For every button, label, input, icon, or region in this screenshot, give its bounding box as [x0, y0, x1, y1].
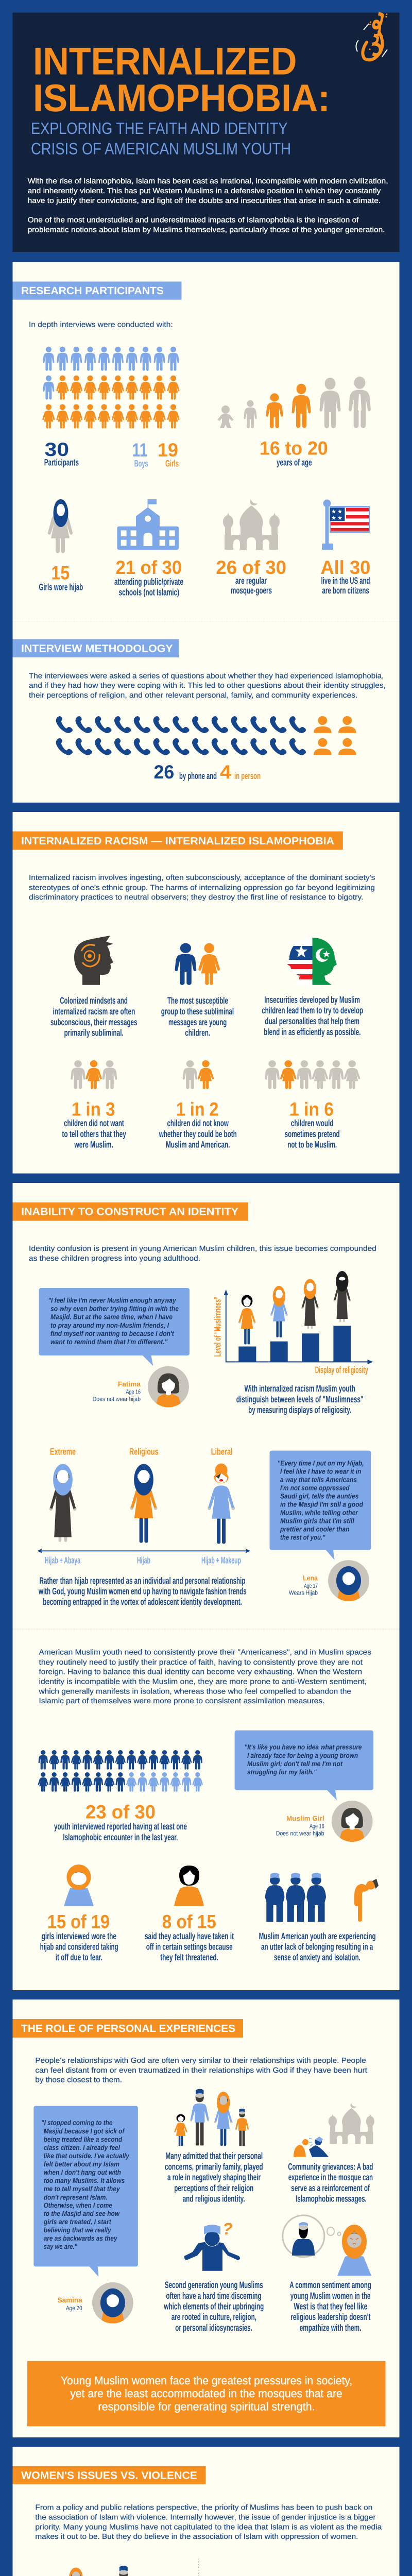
text: personal concerns: [165, 2150, 263, 2204]
text: internalized racism: stereotypes of one's ethnic group. The harms of internalizing oppression go far beyond legitimizing: [29, 884, 375, 892]
caption: Samina: Samina: [58, 2296, 82, 2304]
panel: inability to construct an identity: [12, 1183, 400, 1990]
callout: Lena quote: Saudi girl, tells the aunties: [280, 1493, 359, 1500]
callout: Samina quote: when I don't hang out with: [44, 2168, 121, 2176]
logo: Arabic calligraphy: يقين: [357, 8, 390, 59]
stat: 15 of 19: girls interviewed wore the: [42, 1931, 116, 1941]
text: lack of belonging: [259, 1931, 376, 1962]
text: dual identity: [38, 1649, 371, 1705]
icon: mosque with bad experience: [294, 2103, 374, 2157]
caption: Lena: [289, 1574, 318, 1597]
caption: Samina: Age 20: [66, 2304, 82, 2312]
callout: Lena quote: I'm not some oppressed: [280, 1484, 350, 1492]
stat: 8 of 15: they felt threatened.: [160, 1952, 218, 1962]
stat: 15 girls wore hijab: Girls wore hijab: [39, 582, 83, 592]
stat: 26 by phone and 4 in person: by phone and: [179, 771, 217, 781]
stat: 1 in 2: Muslim and American.: [166, 1140, 230, 1150]
callout: Samina quote: Masjid because I got sick of: [44, 2127, 125, 2135]
stat: 19 girls: 19: [158, 439, 178, 461]
heading: interview methodology: INTERVIEW METHODOLOGY: [21, 642, 173, 654]
stat: all 30: [320, 557, 370, 596]
callout: Muslim Girl quote: I already face for being a young brown: [247, 1752, 358, 1759]
text: policy perspective: [35, 2504, 382, 2541]
callout: Samina quote: believing that we really: [44, 2226, 112, 2234]
stat: 23 of 30: youth interviewed reported having at least one: [54, 1821, 187, 1832]
text: lack of belonging: sense of anxiety and isolation.: [274, 1952, 360, 1962]
panel: research participants and methodology: [12, 262, 400, 803]
callout: Fatima quote: to pray around my non-Muslim friends, I: [50, 1321, 169, 1329]
text: dual identity: Islamic part of themselves were more prone to consistent assimilation measures.: [39, 1697, 324, 1705]
stat: 8 of 15: [145, 1911, 234, 1962]
heading: women's issues: WOMEN'S ISSUES VS. VIOLENCE: [21, 2470, 197, 2481]
figure: extreme: [49, 1447, 76, 1542]
text: identity confusion: Identity confusion is present in young American Muslim children, this issue becomes compounded: [29, 1245, 376, 1253]
icon: family: [174, 2089, 249, 2146]
stat: 21 of 30: 21 of 30: [115, 557, 182, 578]
text: most susceptible group: The most susceptible: [167, 995, 228, 1006]
callout: young Muslim women: responsible for generating spiritual strength.: [98, 2400, 315, 2413]
stat: 30 participants: Participants: [44, 457, 79, 468]
stat: 26 by phone and 4 in person: [153, 761, 261, 783]
callout: Lena quote: Muslim, while telling other: [280, 1509, 358, 1516]
callout: Samina quote: to the Masjid and see how: [44, 2210, 120, 2217]
callout: Samina quote: are as backwards as they: [44, 2234, 118, 2242]
callout: Muslim Girl quote: [235, 1731, 373, 1800]
text: levels of Muslimness: With internalized racism Muslim youth: [244, 1383, 355, 1394]
stat: 8 of 15: 8 of 15: [162, 1911, 216, 1932]
icon: school: [117, 499, 179, 550]
text: levels of Muslimness: [236, 1383, 364, 1415]
stat: 30 participants: 30: [45, 439, 69, 460]
stat: all 30: All 30: [320, 557, 370, 578]
figure: extreme: Extreme: [50, 1447, 76, 1457]
title: ISLAMOPHOBIA:: [33, 76, 330, 120]
heading: personal experiences: [12, 2019, 243, 2038]
stat: 1 in 3: were Muslim.: [74, 1140, 113, 1150]
text: hijab and fashion: Rather than hijab represented as an individual and personal relationship: [39, 1575, 246, 1586]
avatar: Muslim Girl: [332, 1801, 373, 1842]
chart: 26 phones and 4 in-person icons: [56, 716, 356, 755]
text: personal concerns: perceptions of their religion: [174, 2183, 253, 2193]
figure: liberal: [208, 1447, 235, 1544]
text: colonized mindsets: internalized racism are often: [53, 1006, 135, 1016]
callout: Lena quote: the rest of you.": [280, 1534, 325, 1541]
icon: American flag: ★: [331, 515, 336, 521]
stat: 26 of 30: [216, 557, 286, 596]
stat: 26 of 30: are regular: [235, 575, 267, 586]
caption: Fatima: [93, 1380, 141, 1403]
avatar: Samina: [92, 2282, 133, 2324]
stat: 8 of 15: said they actually have taken it: [145, 1931, 234, 1941]
callout: Samina quote: being treated like a second: [44, 2136, 123, 2143]
callout: Lena quote: in the Masjid I'm still a good: [280, 1501, 364, 1509]
text: common sentiment: young Muslim women in the: [290, 2291, 370, 2301]
text: identity confusion: as these children progress into young adulthood.: [29, 1255, 200, 1263]
labels: hijab spectrum: Hijab + Abaya: [45, 1555, 81, 1565]
stat: 1 in 2: [159, 1098, 237, 1150]
chart: level of Muslimness by display of religiosity: Level of "Muslimness": [213, 1297, 223, 1357]
icon: American flag: ★: [337, 515, 342, 521]
text: second generation: or personal idiosyncrasies.: [175, 2323, 252, 2333]
icon: mosque: [223, 499, 280, 550]
callout: Muslim Girl quote: struggling for my faith.": [247, 1768, 317, 1776]
icon: 1 in 3: [71, 1060, 117, 1089]
stat: 15 of 19: 15 of 19: [47, 1911, 110, 1932]
stat: 23 of 30: [54, 1802, 187, 1842]
text: dual identity: identity is incompatible with the Muslim one, they are more prone to anti-Western sentiment,: [39, 1678, 367, 1686]
text: second generation: [164, 2280, 264, 2333]
callout: Fatima quote: so why even bother trying fitting in with the: [50, 1305, 179, 1313]
intro text: problematic notions about Islam by Muslims themselves, particularly those of the younger generation.: [28, 226, 385, 234]
chart: level of Muslimness by display of religiosity: Display of religiosity: [315, 1365, 368, 1375]
text: community grievances: [288, 2162, 373, 2204]
heading: internalized racism: INTERNALIZED RACISM — INTERNALIZED ISLAMOPHOBIA: [21, 835, 334, 847]
subtitle: [31, 119, 291, 158]
stat: 26 of 30: 26 of 30: [216, 557, 286, 578]
labels: hijab spectrum: [45, 1555, 241, 1565]
text: colonized mindsets: [50, 995, 137, 1038]
text: hijab and fashion: [38, 1575, 247, 1607]
heading: interview methodology: [12, 639, 179, 657]
icon: American flag: [322, 500, 370, 550]
stat: 11 boys: [132, 439, 148, 468]
callout: Samina quote: [33, 2106, 138, 2277]
caption: Fatima: Fatima: [118, 1380, 141, 1388]
panel: internalized racism: [12, 812, 400, 1174]
icon: American flag: ★: [331, 509, 336, 515]
callout: Lena quote: I feel like I have to wear it in: [280, 1467, 362, 1475]
heading: personal experiences: THE ROLE OF PERSONAL EXPERIENCES: [21, 2023, 235, 2035]
stat: 21 of 30: attending public/private: [114, 577, 183, 587]
arrow: spectrum: [37, 1549, 250, 1553]
text: community grievances: Islamophobic messages.: [296, 2194, 367, 2204]
stat: 30 participants: [44, 439, 79, 468]
text: most susceptible group: messages are young: [168, 1017, 227, 1027]
text: personal concerns: a role in negatively shaping their: [167, 2172, 261, 2182]
callout: Samina quote: don't represent Islam.: [44, 2193, 108, 2201]
heading: research participants: RESEARCH PARTICIPANTS: [21, 285, 164, 297]
text: methodology: [29, 672, 386, 700]
text: policy perspective: priority. Many young Muslims have not capitulated to the idea that Islam is as violent as the media: [35, 2523, 382, 2532]
stat: 1 in 2: 1 in 2: [176, 1098, 218, 1120]
heading: inability: INABILITY TO CONSTRUCT AN IDENTITY: [21, 1206, 238, 1218]
text: policy perspective: From a policy and public relations perspective, the priority of Muslims has been to push back on: [35, 2504, 372, 2512]
text: identity confusion: [29, 1245, 376, 1263]
icon: American flag: ★: [337, 509, 342, 515]
caption: Muslim Girl: [276, 1815, 324, 1837]
panel: hero: [12, 8, 400, 252]
callout: Fatima quote: want to remind them that I'm different.": [50, 1338, 168, 1346]
callout: Fatima quote: "I feel like I'm never Muslim enough anyway: [48, 1297, 177, 1304]
text: colonized mindsets: Colonized mindsets and: [60, 995, 128, 1006]
text: community grievances: serve as a reinforcement of: [291, 2183, 370, 2193]
text: relationships with God: by those closest to them.: [35, 2076, 122, 2084]
icon: 1 in 6: [265, 1060, 360, 1089]
stat: 1 in 6: [285, 1098, 340, 1150]
text: colonized mindsets: subconscious, their messages: [50, 1017, 137, 1027]
text: insecurities: [262, 995, 363, 1037]
callout: Lena quote: a way that tells Americans: [280, 1476, 357, 1484]
text: relationships with God: [35, 2057, 367, 2084]
text: second generation: are rooted in culture, religion,: [171, 2312, 256, 2322]
stat: 16 to 20 years: 16 to 20: [260, 437, 328, 459]
intro text: With the rise of Islamophobia, Islam has been cast as irrational, incompatible with modern civilization,: [28, 177, 388, 185]
text: policy perspective: makes it out to be. But they do believe in the association of Islam with oppression of women.: [35, 2533, 358, 2541]
text: interviews intro: In depth interviews were conducted with:: [29, 320, 173, 329]
callout: Samina quote: Otherwise, when I come: [44, 2201, 112, 2209]
icon: group of men and isolated praying figure: [265, 1873, 379, 1922]
caption: Lena: Wears Hijab: [289, 1589, 318, 1597]
icon: two children: [175, 943, 220, 985]
stat: 1 in 6: sometimes pretend: [285, 1129, 340, 1139]
text: hijab and fashion: with God, young Muslim women end up having to navigate fashion trends: [38, 1586, 247, 1596]
stat: 26 by phone and 4 in person: in person: [234, 771, 261, 781]
intro text: One of the most understudied and underestimated impacts of Islamophobia is the ingestion of: [28, 216, 359, 224]
text: dual identity: which generally manifests in isolation, whereas those who feel compelled to abandon the: [38, 1687, 351, 1696]
text: insecurities: blend in as efficiently as possible.: [264, 1027, 360, 1037]
labels: hijab spectrum: Hijab + Makeup: [201, 1555, 241, 1565]
text: internalized racism: Internalized racism involves ingesting, often subconsciously, acceptance of the dominant society's: [29, 874, 375, 882]
text: most susceptible group: group to these subliminal: [161, 1006, 234, 1016]
text: levels of Muslimness: by measuring displays of religiosity.: [248, 1404, 351, 1415]
text: relationships with God: can feel distant from or even traumatized in their relationships with God if they have been hurt: [35, 2066, 367, 2075]
panel: role of personal experiences: [12, 1999, 400, 2437]
callout: Muslim Girl quote: "It's like you have no idea what pressure: [244, 1743, 362, 1751]
intro text: [28, 177, 388, 234]
icon: girl wearing hijab: [48, 499, 73, 553]
chart: level of Muslimness by display of religiosity: [213, 1271, 373, 1375]
caption: Muslim Girl: Does not wear hijab: [276, 1830, 324, 1837]
callout: Fatima quote: find myself not wanting to because I don't: [50, 1330, 174, 1337]
figure: liberal: Liberal: [211, 1447, 233, 1457]
text: policy perspective: the association of Islam with violence. Internally however, the issue of gender injustice is a bigger: [35, 2513, 376, 2521]
icon: worried woman imagining imam: [283, 2215, 371, 2276]
callout: young Muslim women: Young Muslim women face the greatest pressures in society,: [61, 2374, 352, 2387]
stat: 1 in 2: whether they could be both: [159, 1129, 237, 1139]
stat: all 30: live in the US and: [321, 575, 370, 586]
callout: Samina quote: felt better about my Islam: [44, 2160, 119, 2168]
text: common sentiment: empathize with them.: [300, 2323, 362, 2333]
callout: young Muslim women: [27, 2361, 385, 2426]
callout: Lena quote: [270, 1451, 371, 1560]
subtitle: EXPLORING THE FAITH AND IDENTITY: [31, 119, 287, 138]
stat: 1 in 6: not to be Muslim.: [287, 1140, 337, 1150]
icon: head with flags: [286, 937, 338, 986]
icon: woman with hair: [174, 1866, 204, 1906]
text: dual identity: American Muslim youth need to consistently prove their "Americaness", and in Muslim spaces: [39, 1649, 371, 1657]
labels: hijab spectrum: Hijab: [137, 1555, 150, 1565]
caption: Fatima: Age 16: [126, 1388, 141, 1395]
callout: Muslim Girl quote: Muslim girl; don't tell me I'm not: [247, 1760, 342, 1768]
text: dual identity: foreign. Having to balance this dual identity can become very exhausting. When the Western: [39, 1668, 362, 1676]
stat: 15 of 19: [40, 1911, 118, 1962]
figure: religious: [129, 1447, 159, 1543]
avatar: Lena: [328, 1560, 369, 1601]
icon: gender inequality: [66, 2566, 133, 2576]
stat: 21 of 30: schools (not Islamic): [119, 587, 179, 598]
stat: 16 to 20 years: years of age: [277, 457, 312, 468]
stat: 1 in 3: [62, 1098, 126, 1150]
callout: Samina quote: say we are.": [44, 2243, 77, 2250]
stat: 15 girls wore hijab: [39, 562, 83, 592]
text: most susceptible group: children.: [185, 1027, 210, 1038]
title: [33, 40, 330, 120]
icon: confused man: ?: [222, 2219, 233, 2238]
text: hijab and fashion: becoming entrapped in the vortex of adolescent identity development.: [43, 1597, 242, 1607]
caption: Fatima: Does not wear hijab: [93, 1396, 141, 1403]
stat: 8 of 15: off in certain settings because: [146, 1941, 233, 1952]
callout: Fatima quote: [39, 1288, 190, 1366]
stat: 11 boys: 11: [132, 439, 148, 461]
text: methodology: their perceptions of religion, and other relevant personal, family, and community experiences.: [29, 691, 357, 700]
callout: Samina quote: class citizen. I already feel: [44, 2144, 120, 2151]
stat: 1 in 6: 1 in 6: [289, 1098, 334, 1120]
text: internalized racism: discriminatory practices to neutral observers; they destroy the first line of resistance to bigotry.: [29, 893, 364, 902]
caption: Muslim Girl: Muslim Girl: [286, 1815, 324, 1822]
text: second generation: often have a hard time discerning: [166, 2291, 262, 2301]
text: personal concerns: and religious identity.: [183, 2194, 245, 2204]
text: internalized racism: [29, 874, 375, 902]
stat: 21 of 30: [114, 557, 183, 598]
caption: Samina: [58, 2296, 82, 2312]
callout: Lena quote: "Every time I put on my Hijab,: [278, 1460, 364, 1467]
panel: women's issues vs violence: [12, 2447, 400, 2576]
chart: 23 of 30 youth: [38, 1750, 203, 1792]
text: dual identity: they routinely need to justify their practice of faith, having to consistently prove they are not: [39, 1658, 363, 1667]
callout: Lena quote: prettier and cooler than: [280, 1525, 350, 1533]
stat: 26 of 30: mosque-goers: [231, 585, 272, 596]
stat: 23 of 30: 23 of 30: [85, 1802, 156, 1823]
stat: 15 of 19: it off due to fear.: [56, 1952, 102, 1962]
icon: age progression: [217, 377, 371, 428]
text: most susceptible group: [161, 995, 234, 1038]
callout: Samina quote: "I stopped coming to the: [41, 2119, 113, 2127]
icon: 1 in 2: [183, 1060, 214, 1089]
heading: internalized racism: [12, 832, 343, 850]
stat: 26 by phone and 4 in person: 4: [220, 761, 231, 783]
figure: religious: Religious: [129, 1447, 159, 1457]
stat: 16 to 20 years: [260, 437, 328, 468]
stat: 1 in 2: children did not know: [167, 1118, 229, 1128]
callout: young Muslim women: yet are the least accommodated in the mosques that are: [70, 2387, 342, 2400]
stat: 1 in 3: to tell others that they: [62, 1129, 126, 1139]
callout: Samina quote: me to tell myself that they: [44, 2185, 121, 2193]
icon: head with spiral: [74, 936, 113, 985]
subtitle: CRISIS OF AMERICAN MUSLIM YOUTH: [31, 140, 291, 158]
stat: 15 girls wore hijab: 15: [52, 562, 70, 583]
text: methodology: The interviewees were asked a series of questions about whether they had experienced Islamophobia,: [29, 672, 384, 680]
callout: Samina quote: like that outside. I've actually: [44, 2152, 130, 2160]
callout: Lena quote: Muslim girls that I'm still: [280, 1517, 354, 1524]
text: relationships with God: People's relationships with God are often very similar to their relationships with people. People: [35, 2057, 366, 2065]
text: insecurities: dual personalities that help them: [265, 1016, 359, 1026]
chart: 11 boys and 19 girls: [42, 347, 180, 429]
text: personal concerns: Many admitted that their personal: [165, 2150, 263, 2161]
heading: women's issues: [12, 2466, 206, 2484]
text: second generation: which elements of their upbringing: [164, 2301, 264, 2311]
caption: Muslim Girl: Age 16: [310, 1822, 324, 1829]
stat: 19 girls: Girls: [165, 458, 179, 468]
stat: 1 in 6: children would: [291, 1118, 334, 1128]
text: second generation: Second generation young Muslims: [165, 2280, 263, 2290]
stat: 1 in 3: children did not want: [64, 1118, 124, 1128]
stat: 23 of 30: Islamophobic encounter in the last year.: [63, 1832, 178, 1842]
text: colonized mindsets: primarily subliminal.: [64, 1027, 124, 1038]
text: personal concerns: concerns, primarily family, played: [165, 2162, 263, 2172]
avatar: Fatima: [148, 1366, 189, 1408]
stat: 11 boys: Boys: [134, 458, 148, 468]
caption: Lena: Age 17: [304, 1582, 318, 1589]
text: common sentiment: [289, 2280, 371, 2333]
icon: woman with orange hijab: [64, 1865, 94, 1906]
heading: inability: [12, 1202, 248, 1221]
title: INTERNALIZED: [33, 40, 297, 83]
stat: all 30: are born citizens: [322, 585, 369, 596]
callout: Samina quote: girls are treated, I start: [43, 2218, 111, 2226]
text: methodology: and if they had how they were coping with it. This led to other questions about their identity struggles,: [29, 682, 386, 690]
icon: confused man: [184, 2219, 240, 2271]
intro text: and inherently violent. This has put Western Muslims in a defensive position in which they constantly: [28, 187, 381, 195]
stat: 26 by phone and 4 in person: 26: [153, 761, 174, 783]
text: common sentiment: West is that they feel like: [294, 2301, 367, 2311]
text: common sentiment: religious leadership doesn't: [290, 2312, 370, 2322]
callout: Fatima quote: Masjid. But at the same time, when I have: [50, 1313, 173, 1321]
stat: 15 of 19: hijab and considered taking: [40, 1941, 118, 1952]
intro text: have to justify their convictions, and fight off the doubts and insecurities that arise in such a climate.: [28, 197, 381, 205]
callout: Samina quote: too many Muslims. It allows: [44, 2177, 125, 2184]
text: insecurities: Insecurities developed by Muslim: [264, 995, 360, 1005]
heading: research participants: [12, 281, 181, 300]
stat: 1 in 3: 1 in 3: [72, 1098, 115, 1120]
caption: Lena: Lena: [303, 1574, 318, 1582]
